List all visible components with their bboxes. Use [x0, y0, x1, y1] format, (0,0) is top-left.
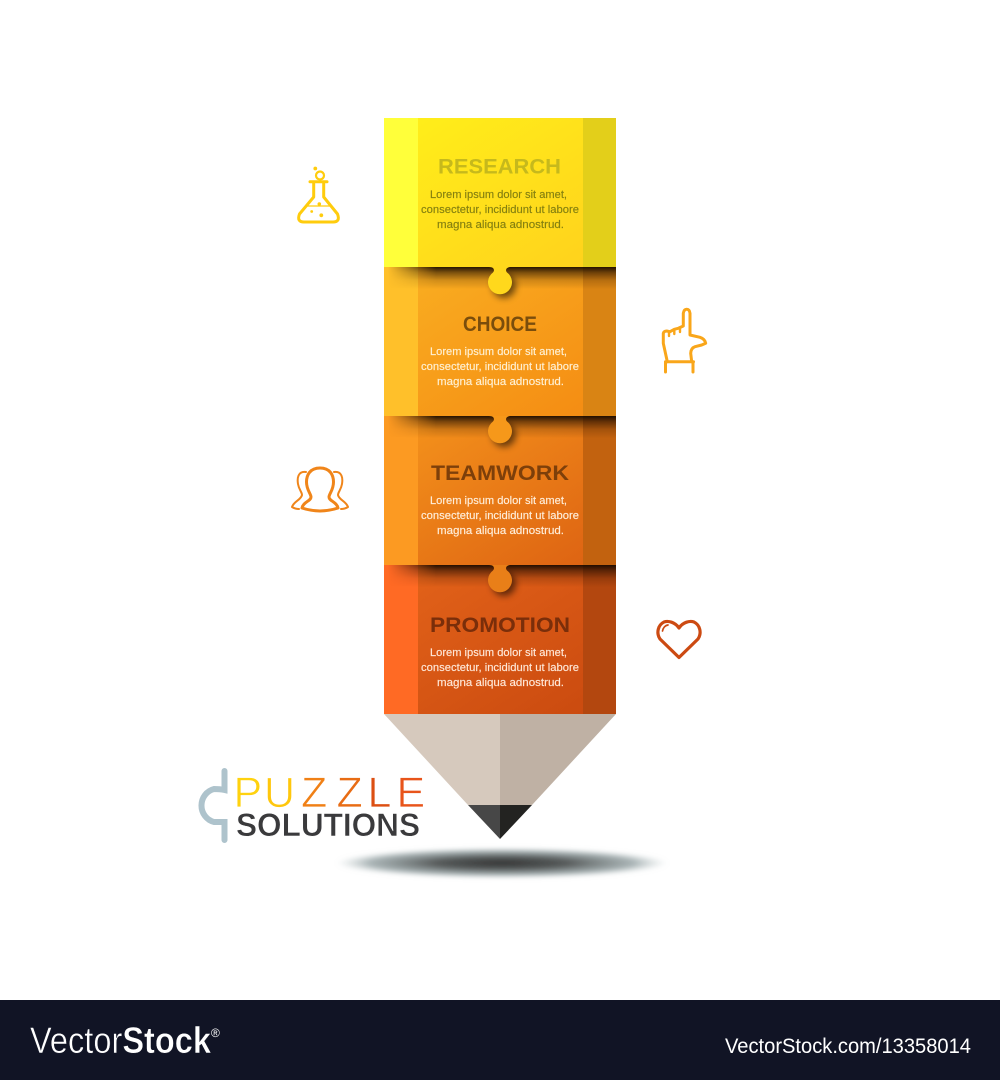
registered mark: ®: [211, 1026, 220, 1040]
panel: choice: consectetur, incididunt ut labore: [421, 361, 579, 373]
panel: choice: Lorem ipsum dolor sit amet,: [430, 346, 567, 358]
footer bar: [0, 1000, 1000, 1080]
logo word solutions: SOLUTIONS: [236, 807, 420, 843]
logo word puzzle: Z: [301, 769, 327, 817]
footer brand: VectorStock: [30, 1020, 211, 1061]
panel: research: consectetur, incididunt ut labore: [421, 204, 579, 216]
logo word puzzle: U: [264, 769, 295, 817]
ground shadow: [336, 848, 668, 878]
panel: research: magna aliqua adnostrud.: [437, 219, 564, 231]
icon: heart: [658, 621, 700, 658]
icon: pointing hand: [663, 309, 706, 372]
panel: promotion: magna aliqua adnostrud.: [437, 677, 564, 689]
logo: puzzle solutions: [201, 769, 425, 843]
panel: promotion: [384, 565, 616, 714]
logo word puzzle: P: [234, 769, 262, 817]
panel: choice: CHOICE: [463, 313, 537, 336]
panel: research: Lorem ipsum dolor sit amet,: [430, 189, 567, 201]
panel: teamwork: TEAMWORK: [431, 462, 569, 485]
panel: research: RESEARCH: [438, 156, 561, 178]
panel: choice: [384, 267, 616, 416]
panel: promotion: Lorem ipsum dolor sit amet,: [430, 647, 567, 659]
panel: teamwork: consectetur, incididunt ut labore: [421, 510, 579, 522]
panel: research: [384, 118, 616, 267]
logo word puzzle: E: [396, 769, 425, 817]
pencil tip: [384, 714, 616, 839]
panel: teamwork: magna aliqua adnostrud.: [437, 525, 564, 537]
footer id: VectorStock.com/13358014: [725, 1035, 971, 1058]
icon: flask: [299, 167, 338, 222]
panel: choice: magna aliqua adnostrud.: [437, 376, 564, 388]
panel: teamwork: [384, 416, 616, 565]
panel: promotion: consectetur, incididunt ut labore: [421, 662, 579, 674]
panel: teamwork: Lorem ipsum dolor sit amet,: [430, 495, 567, 507]
icon: team of people: [292, 468, 348, 511]
logo puzzle mark: [201, 771, 224, 840]
logo word puzzle: Z: [336, 769, 363, 817]
logo word puzzle: L: [368, 769, 391, 817]
panel: promotion: PROMOTION: [430, 614, 570, 637]
